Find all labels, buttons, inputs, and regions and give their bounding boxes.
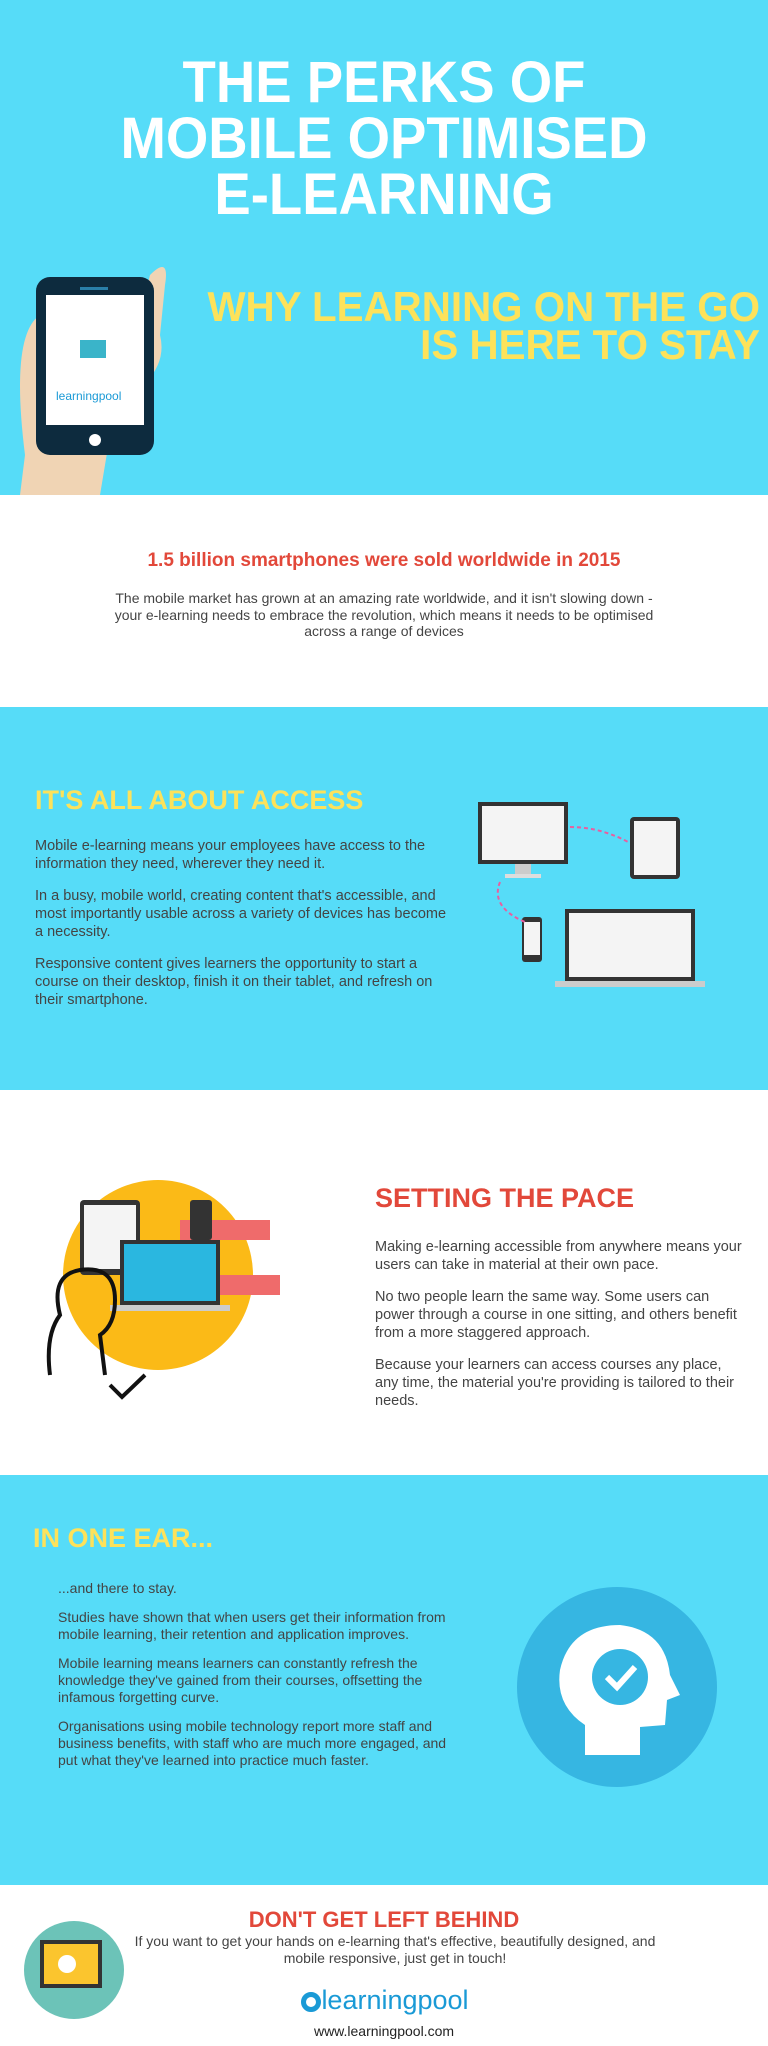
subtitle: WHY LEARNING ON THE GO — [207, 283, 760, 330]
icon: devices — [478, 802, 705, 987]
icon: head with check — [517, 1587, 717, 1787]
text: access: Mobile e-learning means your employees have access to the information they need, wherever they need it. — [35, 838, 425, 872]
text: ear: Organisations using mobile technology report more staff and business benefits, with staff who are much more engaged, and put what they've learned into practice much faster. — [58, 1718, 446, 1768]
text: access: Responsive content gives learners the opportunity to start a course on their desktop, finish it on their tablet, and refresh on their smartphone. — [35, 956, 432, 1008]
icon: hand holding phone: learningpool — [56, 389, 121, 403]
subtitle: IS HERE TO STAY — [420, 321, 760, 368]
panel: pace — [46, 1180, 742, 1409]
title — [120, 50, 648, 227]
text: pace — [375, 1239, 742, 1409]
panel: ear — [0, 1475, 768, 1885]
footer heading: DON'T GET LEFT BEHIND — [249, 1907, 519, 1932]
subtitle — [207, 283, 760, 368]
icon: pace illustration — [46, 1180, 280, 1400]
text: ear: Mobile learning means learners can constantly refresh the knowledge they've gained from their courses, offsetting the infamous forgetting curve. — [58, 1655, 422, 1705]
heading: pace: SETTING THE PACE — [375, 1183, 634, 1213]
header panel — [0, 0, 768, 495]
stat panel — [114, 550, 653, 639]
text: ear — [58, 1580, 446, 1768]
logo: learningpool — [321, 1985, 469, 2015]
footer text: If you want to get your hands on e-learning that's effective, beautifully designed, and mobile responsive, just get in touch! — [135, 1933, 655, 1966]
title: E-LEARNING — [214, 162, 554, 227]
text: pace: Making e-learning accessible from anywhere means your users can take in material at their own pace. — [375, 1239, 742, 1273]
panel: access — [0, 707, 768, 1090]
stat text: The mobile market has grown at an amazing rate worldwide, and it isn't slowing down - your e-learning needs to embrace the revolution, which means it needs to be optimised across a range of devices — [115, 590, 653, 639]
title: MOBILE OPTIMISED — [120, 106, 648, 171]
icon: tablet circle — [24, 1921, 124, 2019]
text: ear: Studies have shown that when users get their information from mobile learning, their retention and application improves. — [58, 1609, 446, 1642]
title: THE PERKS OF — [183, 50, 585, 115]
footer panel — [24, 1907, 655, 2039]
icon: hand holding phone — [20, 267, 166, 495]
text: ear: ...and there to stay. — [58, 1580, 177, 1596]
url: www.learningpool.com — [314, 2023, 454, 2039]
text: access: In a busy, mobile world, creating content that's accessible, and most importantly usable across a variety of devices has become a necessity. — [35, 888, 446, 940]
text: pace: No two people learn the same way. Some users can power through a course in one sitting, and others benefit from a more staggered approach. — [375, 1289, 737, 1341]
heading: ear: IN ONE EAR... — [33, 1523, 213, 1553]
stat headline: 1.5 billion smartphones were sold worldwide in 2015 — [147, 550, 620, 571]
text: access — [35, 838, 446, 1008]
heading: access: IT'S ALL ABOUT ACCESS — [35, 785, 363, 815]
text: pace: Because your learners can access courses any place, any time, the material you're providing is tailored to their needs. — [375, 1357, 734, 1409]
